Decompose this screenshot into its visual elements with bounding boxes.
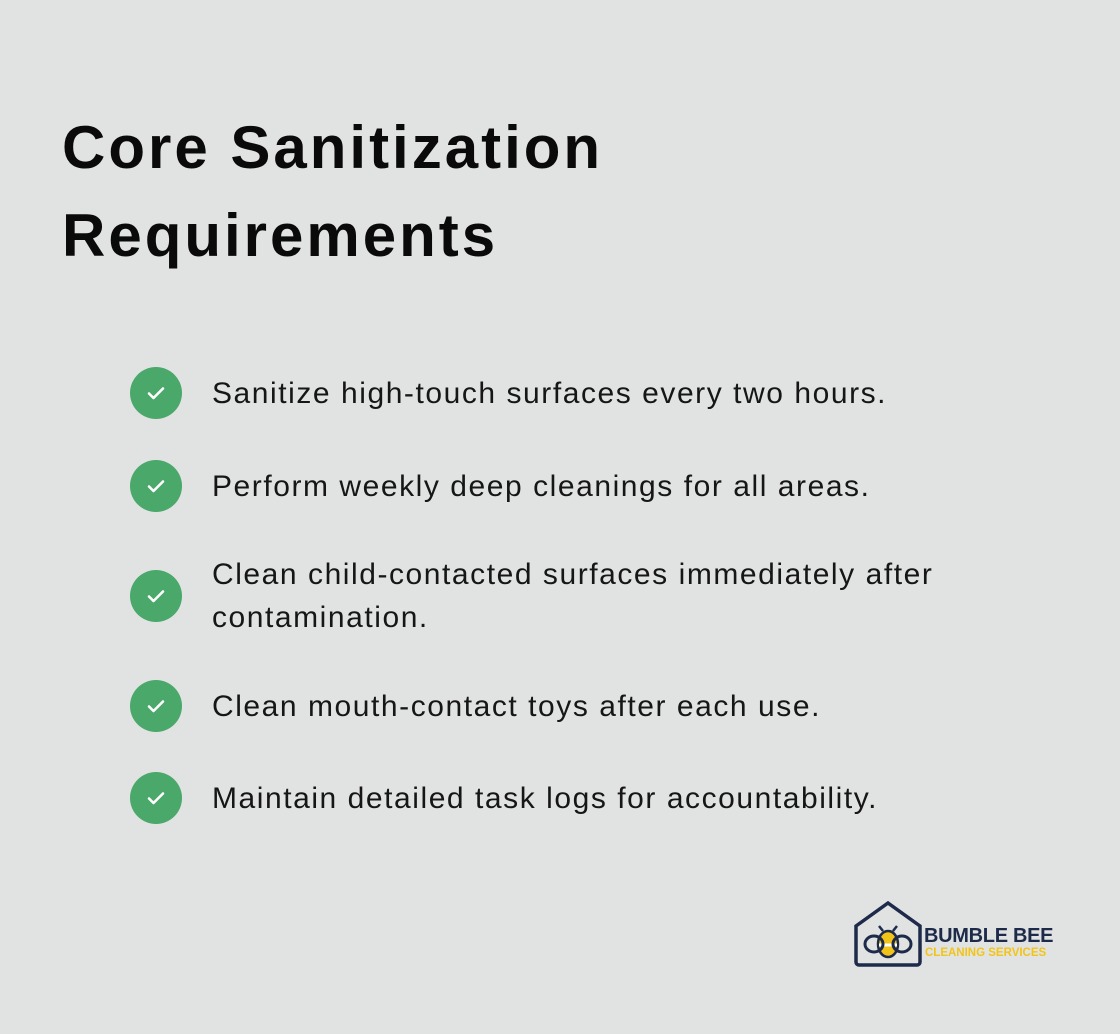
item 4: Clean mouth-contact toys after each use.: [212, 690, 821, 722]
item 5: Maintain detailed task logs for accountability.: [212, 782, 878, 814]
item 4: [130, 680, 821, 732]
logo: [854, 900, 1053, 967]
item 3: [130, 558, 933, 634]
item 3: contamination.: [212, 601, 429, 634]
item 2: [130, 460, 870, 512]
item 3: Clean child-contacted surfaces immediately after: [212, 558, 933, 591]
title: [62, 114, 603, 269]
item 1: Sanitize high-touch surfaces every two hours.: [212, 376, 887, 410]
item 2: Perform weekly deep cleanings for all areas.: [212, 470, 870, 502]
item 1: [130, 367, 887, 419]
title: Core Sanitization: [62, 114, 603, 181]
title: Requirements: [62, 202, 498, 269]
logo: BUMBLE BEE: [924, 925, 1053, 947]
item 5: [130, 772, 878, 824]
logo: CLEANING SERVICES: [925, 947, 1046, 959]
